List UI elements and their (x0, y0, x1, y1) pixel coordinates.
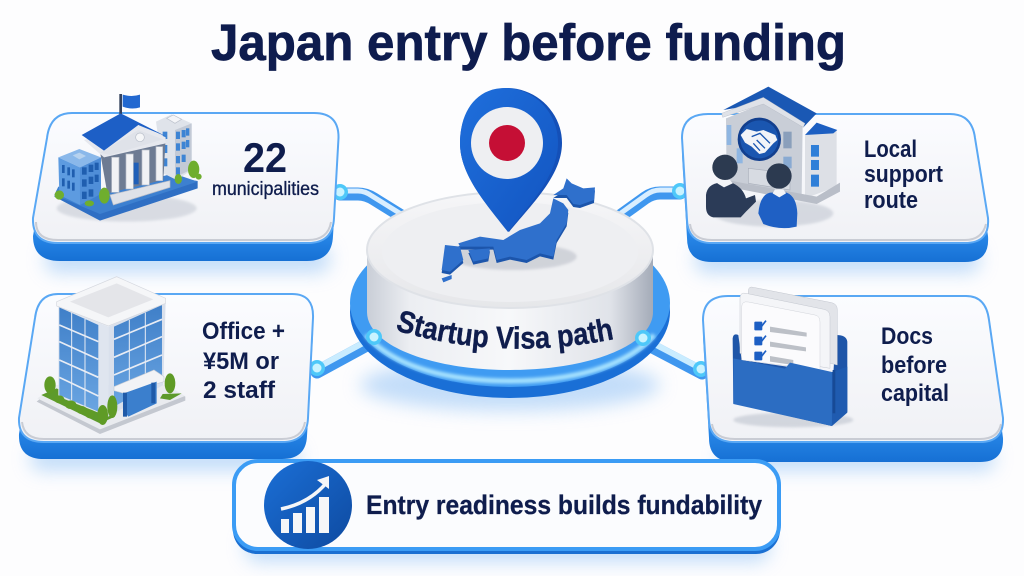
icon: document folder (733, 287, 853, 427)
label: local support route: route (864, 187, 918, 214)
label: docs before capital: before (881, 352, 947, 379)
connector: office to hub (309, 337, 374, 376)
callout: entry readiness (233, 461, 780, 554)
callout text: Entry readiness builds fundability (366, 490, 762, 520)
panel: 22 municipalities (33, 94, 339, 261)
icon: government buildings (54, 94, 202, 222)
icon: location pin with Japanese flag (460, 88, 562, 232)
label: local support route: Local (864, 136, 917, 163)
panel: office requirement (19, 277, 313, 459)
icon: growth chart (264, 461, 352, 549)
platform top (367, 192, 653, 308)
connector: local support to hub (620, 183, 688, 216)
label: Startup Visa path: Startup Visa path (397, 311, 613, 354)
icon: support office with handshake (706, 87, 840, 228)
label: docs before capital (881, 323, 949, 407)
central platform (350, 88, 670, 398)
connector: docs to hub (643, 338, 709, 377)
label: office requirement: 2 staff (203, 377, 276, 404)
panel: docs before capital (703, 287, 1003, 462)
label: office requirement: Office + (202, 318, 285, 345)
base ring (350, 219, 670, 398)
stat: 22: 22 (243, 134, 287, 181)
label: docs before capital: Docs (881, 323, 933, 350)
label: office requirement (202, 318, 285, 404)
icon: map of Japan (442, 178, 595, 282)
label: local support route (864, 136, 943, 214)
title: Japan entry before funding (211, 14, 846, 71)
panel: local support route (682, 87, 988, 262)
platform cylinder (367, 252, 653, 370)
connector: municipalities to hub (332, 184, 403, 217)
handshake badge (738, 118, 781, 161)
label: local support route: support (864, 161, 943, 188)
label: municipalities: municipalities (212, 179, 319, 200)
label: office requirement: ¥5M or (203, 348, 279, 375)
soft glow shadows (30, 245, 995, 562)
icon: office tower (37, 277, 185, 434)
label: docs before capital: capital (881, 380, 949, 407)
hub nodes (366, 329, 651, 346)
